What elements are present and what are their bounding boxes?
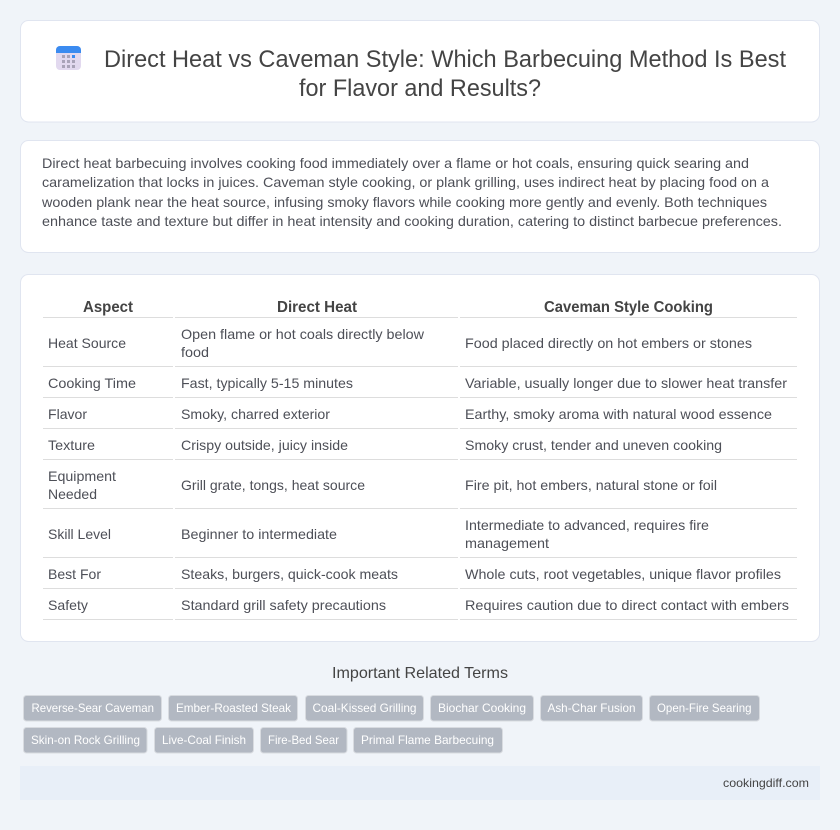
- heading: important related terms: Important Related Terms: [332, 665, 508, 682]
- row: flavor: [48, 406, 772, 422]
- row: flavor: Smoky, charred exterior: [181, 406, 330, 422]
- row: texture: Crispy outside, juicy inside: [181, 437, 348, 453]
- row: skill level: [48, 517, 709, 551]
- footer: [20, 766, 820, 800]
- row: texture: Smoky crust, tender and uneven cooking: [465, 437, 722, 453]
- row: equipment needed: [48, 468, 717, 502]
- text block: introduction paragraph: enhance taste and texture but differ in heat intensity and cooking duration, catering to distinct barbecue preferences.: [42, 213, 782, 229]
- text block: introduction paragraph: wooden plank near the heat source, infusing smoky flavors while cooking more gently and evenly. Both techniques: [41, 194, 767, 210]
- row: skill level: management: [465, 535, 549, 551]
- related term tags: Primal Flame Barbecuing: [361, 733, 494, 747]
- text block: introduction paragraph: Direct heat barbecuing involves cooking food immediately over a flame or hot coals, ensuring quick searing and: [42, 155, 749, 171]
- row: heat source: Open flame or hot coals directly below: [181, 326, 425, 342]
- related term tags: Fire-Bed Sear: [268, 733, 339, 747]
- row: texture: Texture: [48, 437, 95, 453]
- row: cooking time: Variable, usually longer due to slower heat transfer: [465, 375, 787, 391]
- row: skill level: Beginner to intermediate: [181, 526, 337, 542]
- row: equipment needed: Grill grate, tongs, heat source: [181, 477, 365, 493]
- row: heat source: Heat Source: [48, 335, 126, 351]
- row: safety: Requires caution due to direct contact with embers: [465, 597, 789, 613]
- related term tags: [24, 696, 760, 753]
- related term tags: Live-Coal Finish: [162, 733, 246, 747]
- row: texture: [48, 437, 722, 453]
- row: cooking time: [48, 375, 787, 391]
- related term tags: Open-Fire Searing: [657, 701, 752, 715]
- footer: cookingdiff.com: [723, 776, 809, 790]
- related term tags: Skin-on Rock Grilling: [31, 733, 140, 747]
- row: equipment needed: Fire pit, hot embers, natural stone or foil: [465, 477, 717, 493]
- row: equipment needed: Equipment: [48, 468, 116, 484]
- related term tags: Biochar Cooking: [438, 701, 526, 715]
- row: safety: Standard grill safety precautions: [181, 597, 386, 613]
- table header row: [83, 299, 713, 316]
- title: Direct Heat vs Caveman Style: Which Barbecuing Method Is Best: [104, 46, 786, 73]
- table header row: Aspect: [83, 299, 134, 316]
- row: best for: Whole cuts, root vegetables, unique flavor profiles: [465, 566, 781, 582]
- row: heat source: food: [181, 344, 209, 360]
- row: equipment needed: Needed: [48, 486, 97, 502]
- row: skill level: Intermediate to advanced, requires fire: [465, 517, 709, 533]
- row: best for: [48, 566, 781, 582]
- related term tags: Coal-Kissed Grilling: [312, 701, 416, 715]
- row: safety: Safety: [48, 597, 88, 613]
- table header row: Caveman Style Cooking: [544, 299, 713, 316]
- panel: introduction: [20, 140, 820, 252]
- panel: comparison table: [20, 274, 820, 642]
- row: cooking time: Fast, typically 5-15 minutes: [181, 375, 353, 391]
- row: safety: [48, 597, 789, 613]
- row: cooking time: Cooking Time: [48, 375, 136, 391]
- panel: title card: [20, 20, 820, 122]
- table header row: Direct Heat: [277, 299, 358, 316]
- related term tags: Ember-Roasted Steak: [176, 701, 292, 715]
- row: flavor: Earthy, smoky aroma with natural wood essence: [465, 406, 772, 422]
- related term tags: Ash-Char Fusion: [548, 701, 636, 715]
- text block: introduction paragraph: [41, 155, 782, 229]
- title: [104, 46, 786, 102]
- text block: introduction paragraph: caramelization that locks in juices. Caveman style cooking, or plank grilling, uses indirect heat by placing food on a: [42, 174, 769, 190]
- row: skill level: Skill Level: [48, 526, 111, 542]
- icon: calendar grid: [56, 46, 81, 70]
- related term tags: Reverse-Sear Caveman: [32, 701, 154, 715]
- row: best for: Best For: [48, 566, 101, 582]
- row: flavor: Flavor: [48, 406, 87, 422]
- row: heat source: [48, 326, 752, 360]
- title: for Flavor and Results?: [299, 75, 541, 102]
- row: heat source: Food placed directly on hot embers or stones: [465, 335, 752, 351]
- row: best for: Steaks, burgers, quick-cook meats: [181, 566, 398, 582]
